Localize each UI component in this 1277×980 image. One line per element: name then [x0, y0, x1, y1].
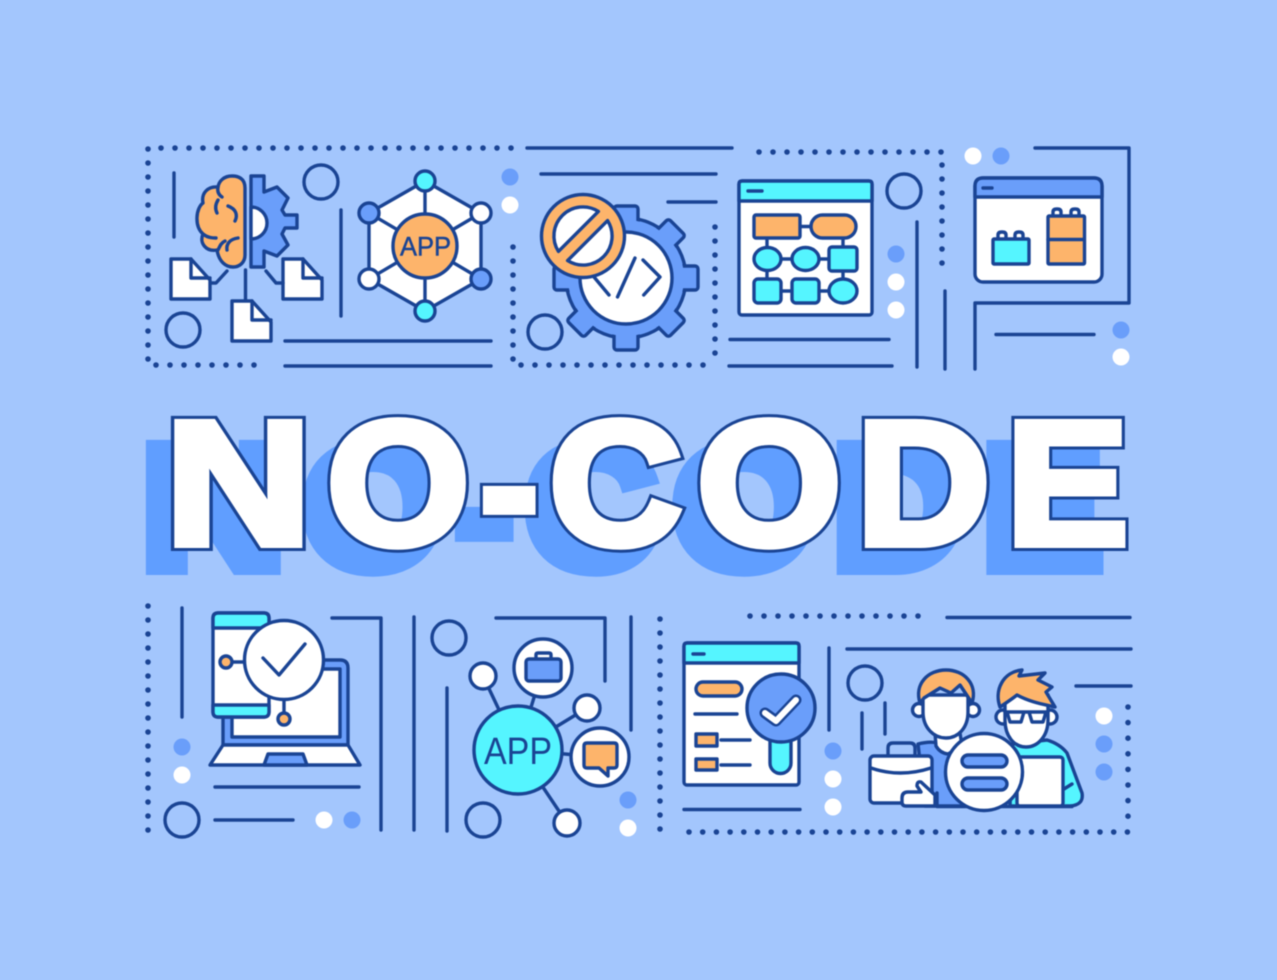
right worker head	[996, 710, 1010, 724]
icon: app hexagon network	[359, 171, 491, 321]
documents	[171, 259, 210, 299]
connectors	[232, 662, 284, 713]
icon: phone and laptop with check	[210, 613, 360, 765]
right worker hair	[998, 670, 1055, 707]
chat bubble	[584, 743, 617, 776]
briefcase	[536, 653, 551, 659]
menu badge	[946, 734, 1022, 810]
briefcase	[888, 743, 915, 757]
icon: app connections	[470, 639, 629, 836]
title outline: D	[857, 386, 990, 582]
left worker head	[912, 704, 926, 716]
icon: block window	[975, 178, 1102, 282]
title outline: C	[549, 386, 682, 582]
title fill: D	[857, 386, 990, 582]
title fill: N	[165, 386, 311, 582]
icon: two workers	[870, 670, 1082, 810]
title fill: E	[1006, 386, 1128, 582]
title fill: O	[327, 386, 469, 582]
app label: APP	[484, 731, 552, 773]
gear half	[251, 176, 297, 267]
title fill: O	[697, 386, 841, 582]
title outline: -	[480, 388, 539, 584]
app label: APP	[400, 232, 451, 262]
icon: checklist window with magnifier	[684, 643, 815, 785]
title shadow: C	[524, 410, 657, 606]
title shadow: -	[455, 412, 514, 608]
laptop	[223, 660, 348, 745]
title outline: N	[165, 386, 311, 582]
title fill: -	[480, 388, 539, 584]
title shadow: N	[140, 410, 286, 606]
title: NO-CODE	[140, 386, 1128, 608]
prohibition sign	[542, 194, 624, 278]
hand	[902, 782, 935, 806]
title shadow: E	[981, 410, 1103, 606]
bottom decorative frame	[148, 606, 1131, 837]
left worker hair	[919, 670, 973, 703]
check badge	[244, 620, 324, 700]
phone	[213, 613, 269, 717]
title fill: C	[549, 386, 682, 582]
glasses	[1005, 712, 1048, 722]
icon: flowchart window	[739, 181, 872, 315]
title shadow: D	[832, 410, 965, 606]
title shadow: O	[672, 410, 816, 606]
title outline: O	[327, 386, 469, 582]
title outline: O	[697, 386, 841, 582]
title outline: E	[1006, 386, 1128, 582]
brain half	[197, 176, 245, 267]
right worker body	[1010, 740, 1082, 806]
left worker body	[918, 742, 970, 806]
top decorative frame	[148, 148, 1130, 369]
magnifier	[770, 738, 791, 774]
icon: brain and gear with documents	[171, 176, 322, 341]
title shadow: O	[302, 410, 444, 606]
icon: no code gear	[542, 194, 698, 350]
